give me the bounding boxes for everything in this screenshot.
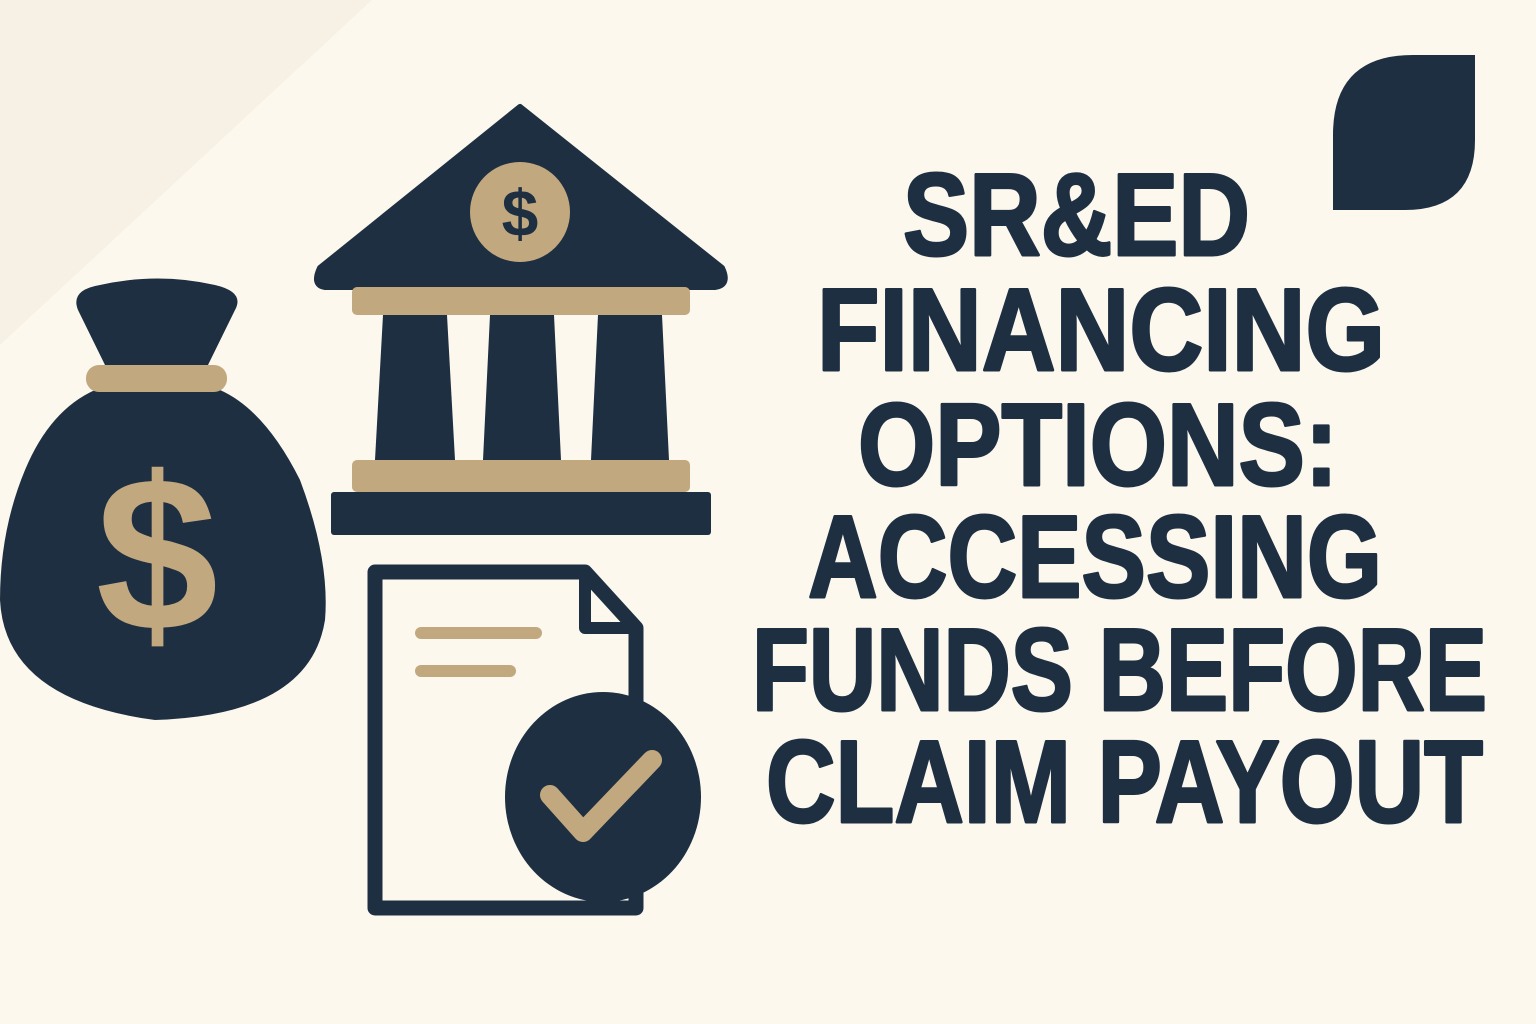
icon: leaf shape	[1333, 55, 1475, 210]
icon: bank building	[317, 107, 725, 535]
bank roof	[317, 107, 725, 287]
icon: approved document	[375, 572, 701, 908]
icon: money bag: $	[96, 431, 218, 677]
check circle	[505, 692, 701, 902]
title: OPTIONS:	[858, 379, 1338, 510]
icon: money bag	[0, 278, 326, 720]
title: SR&ED	[903, 149, 1250, 280]
title	[752, 149, 1487, 847]
title: FINANCING	[817, 264, 1385, 395]
coin on roof	[470, 162, 570, 262]
title: ACCESSING	[808, 491, 1382, 622]
coin on roof: $	[502, 176, 538, 250]
